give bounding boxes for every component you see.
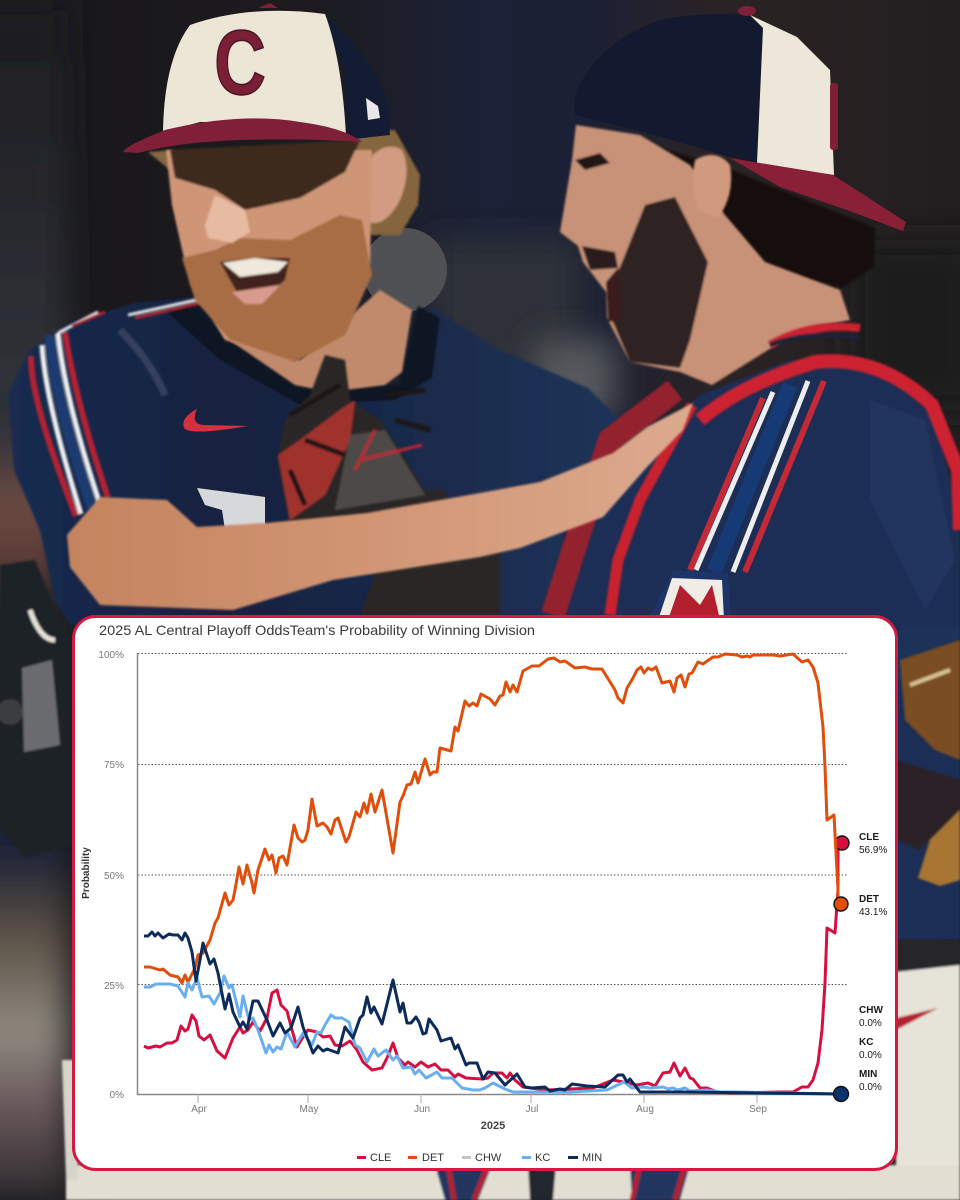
- cap logo, seen from the side: [830, 83, 838, 150]
- player one: sleeve stripes: [31, 298, 205, 516]
- x axis month labels: Apr: [191, 1104, 207, 1115]
- player one: forearm and hand: [67, 403, 693, 610]
- end labels: DET: [859, 894, 879, 905]
- player two: shoulder stripes: [690, 381, 824, 572]
- player two: face and neck: [560, 125, 850, 385]
- gridlines: [138, 654, 848, 984]
- y axis labels: [98, 650, 124, 1101]
- player one: neck: [222, 290, 412, 392]
- player one: jersey: [8, 296, 625, 625]
- legend: [357, 1152, 602, 1164]
- end labels: CHW: [859, 1005, 883, 1016]
- x axis month labels: Sep: [749, 1104, 767, 1115]
- axes: [138, 653, 845, 1103]
- end labels: 0.0%: [859, 1050, 882, 1061]
- catcher's mitt: [277, 355, 500, 615]
- x axis month labels: Jun: [414, 1104, 430, 1115]
- x axis month labels: [191, 1104, 767, 1115]
- player one: cap: [123, 3, 390, 153]
- player two: chest protector straps: [553, 327, 960, 615]
- white pants: [62, 940, 960, 1200]
- helmet at left edge: [0, 560, 72, 858]
- player one: Nike swoosh: [183, 409, 248, 432]
- end labels: CLE: [859, 832, 879, 843]
- cap logo letter: C: [214, 11, 266, 114]
- end labels: 0.0%: [859, 1082, 882, 1093]
- chart card: [74, 616, 896, 1170]
- y axis labels: 75%: [104, 760, 124, 771]
- chart title: 2025 AL Central Playoff OddsTeam's Probability of Winning Division: [99, 622, 535, 638]
- end labels: 0.0%: [859, 1018, 882, 1029]
- y axis labels: 50%: [104, 871, 124, 882]
- x axis month labels: Aug: [636, 1104, 654, 1115]
- y axis labels: 100%: [98, 650, 124, 661]
- player two: hair: [640, 142, 875, 288]
- line: KC: [144, 976, 840, 1094]
- end marker: DET: [834, 897, 848, 911]
- legend: CHW: [475, 1152, 502, 1164]
- player one: face: [166, 140, 372, 362]
- line: DET: [144, 654, 838, 983]
- player two: jersey: [550, 360, 960, 940]
- player two: cap: [574, 6, 906, 231]
- player two: chest patch: [648, 570, 731, 620]
- x axis month labels: May: [300, 1104, 318, 1115]
- end labels: 43.1%: [859, 907, 887, 918]
- line: MIN: [144, 932, 840, 1094]
- end labels: 56.9%: [859, 845, 887, 856]
- cap brand mark: [366, 98, 380, 120]
- player one: jersey number: [197, 488, 265, 530]
- end marker: MIN: [834, 1086, 848, 1102]
- y axis title: Probability: [81, 847, 92, 899]
- end labels: KC: [859, 1037, 873, 1048]
- y axis labels: 25%: [104, 981, 124, 992]
- end marker: CLE: [835, 836, 849, 850]
- line: CLE: [144, 843, 838, 1093]
- y axis labels: 0%: [110, 1090, 124, 1101]
- x axis month labels: Jul: [526, 1104, 538, 1115]
- player one: hair and ear: [148, 130, 420, 235]
- legend: DET: [422, 1152, 444, 1164]
- legend: CLE: [370, 1152, 391, 1164]
- legend: KC: [535, 1152, 550, 1164]
- legend: MIN: [582, 1152, 602, 1164]
- right-edge gloves: [897, 640, 960, 886]
- x axis title: 2025: [481, 1120, 505, 1132]
- end labels: [859, 832, 887, 1093]
- end labels: MIN: [859, 1069, 877, 1080]
